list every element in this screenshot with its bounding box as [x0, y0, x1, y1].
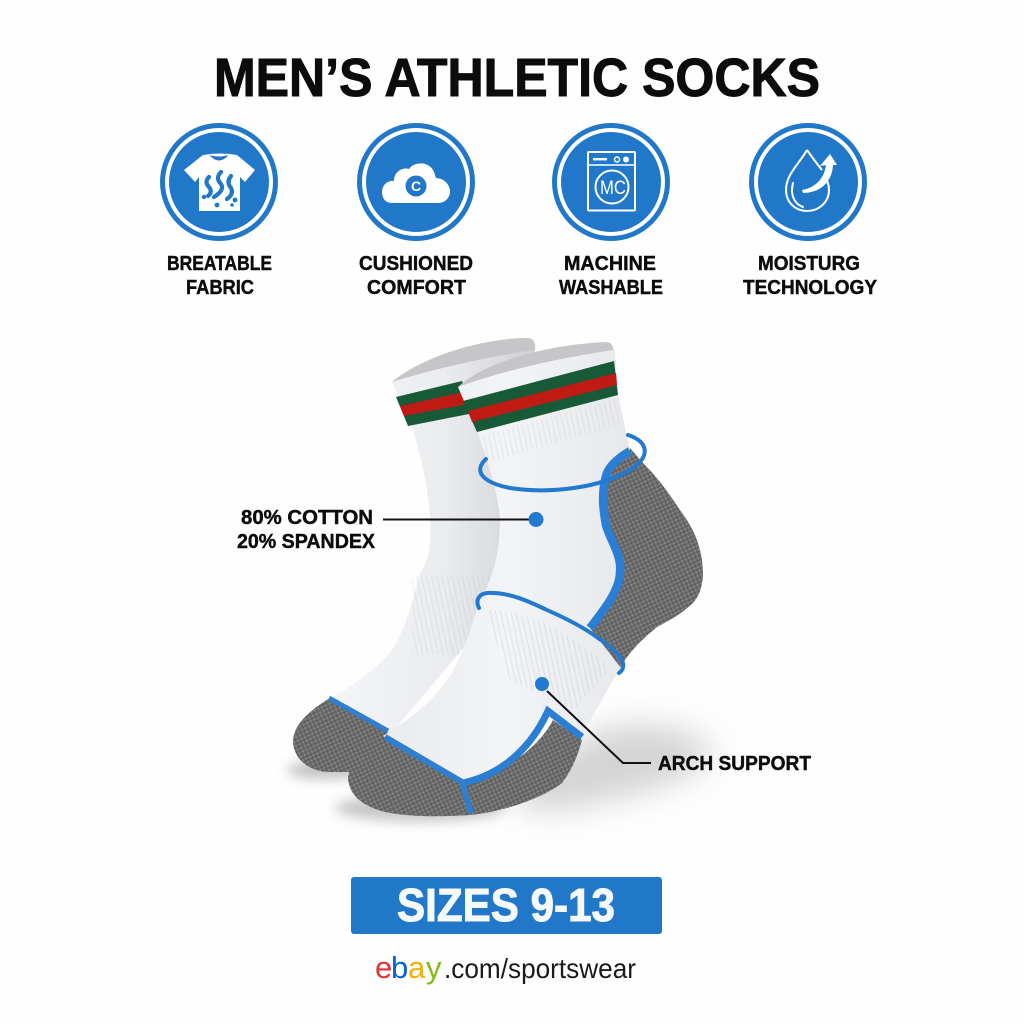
front sock ribbing	[480, 398, 624, 462]
label: breatable fabric: BREATABLE	[167, 252, 272, 275]
front sock stripes	[463, 361, 618, 432]
front sock blue edging	[590, 451, 630, 628]
front sock white body	[383, 342, 630, 783]
product illustration: pair of socks	[287, 338, 715, 822]
front sock grey heel	[585, 448, 703, 668]
feature: breathable fabric	[160, 123, 278, 299]
callout: fabric composition: 80% COTTON	[241, 507, 373, 529]
store url: b	[391, 950, 408, 985]
feature: moisture technology	[743, 123, 877, 299]
back sock opening	[392, 338, 535, 382]
store url: y	[426, 950, 442, 985]
size banner	[351, 877, 662, 934]
ground shadow	[287, 724, 715, 822]
title: MEN’S ATHLETIC SOCKS	[214, 48, 820, 108]
feature: machine washable	[552, 123, 670, 299]
ankle measurement ring	[480, 435, 645, 490]
store url	[375, 950, 636, 985]
label: cushioned comfort: CUSHIONED	[359, 252, 473, 275]
label: breatable fabric: FABRIC	[186, 276, 254, 299]
front sock	[348, 342, 703, 816]
store url: .com/sportswear	[444, 953, 636, 984]
icon: washing machine: MC	[600, 178, 626, 199]
label: moisturg technology: MOISTURG	[758, 252, 860, 275]
arch measurement ring	[477, 593, 623, 673]
callout: arch support	[535, 677, 811, 775]
label: machine washable: WASHABLE	[559, 276, 663, 299]
icon: water drop with arrow	[749, 123, 867, 241]
store url: e	[375, 950, 392, 985]
store url: a	[408, 950, 426, 985]
front sock opening	[458, 342, 613, 387]
back sock stripes	[396, 381, 474, 426]
back sock	[293, 338, 535, 772]
front sock grey sole and toe	[348, 711, 582, 816]
icon: cloud: C	[411, 178, 421, 194]
icon: washing machine	[552, 123, 670, 241]
size banner: SIZES 9-13	[397, 879, 615, 931]
icon: t-shirt with vapour	[160, 123, 278, 241]
label: moisturg technology: TECHNOLOGY	[743, 276, 877, 299]
label: moisturg technology	[743, 252, 877, 299]
label: cushioned comfort	[359, 252, 473, 299]
back sock toe	[293, 698, 392, 772]
label: machine washable: MACHINE	[564, 252, 656, 275]
callout: fabric composition	[237, 507, 544, 553]
icon: cloud	[357, 123, 475, 241]
callout: arch support: ARCH SUPPORT	[658, 753, 811, 775]
label: breatable fabric	[167, 252, 272, 299]
feature row	[160, 123, 877, 299]
callout: fabric composition: 20% SPANDEX	[237, 531, 376, 553]
feature: cushioned comfort	[357, 123, 475, 299]
label: machine washable	[559, 252, 663, 299]
label: cushioned comfort: COMFORT	[367, 276, 466, 299]
